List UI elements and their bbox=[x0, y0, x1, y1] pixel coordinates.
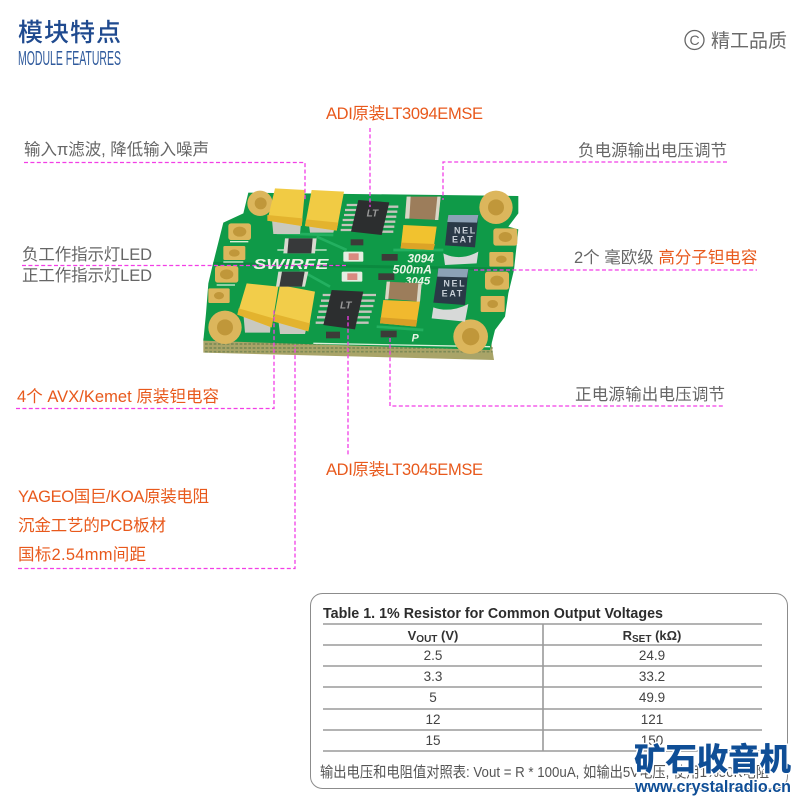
title: module features bbox=[18, 19, 121, 70]
table content bbox=[408, 628, 681, 748]
callout: status LEDs bbox=[22, 245, 346, 285]
inductors and shielded parts bbox=[276, 215, 478, 322]
callout: LT3094: ADI原装LT3094EMSE bbox=[326, 104, 483, 123]
watermark: www.crystalradio.cn bbox=[634, 777, 791, 796]
callout: positive output adjust bbox=[390, 338, 725, 406]
table content: (kΩ) bbox=[651, 628, 681, 643]
callout: LT3045: ADI原装LT3045EMSE bbox=[326, 460, 483, 479]
callout: tantalum capacitors: 4个 AVX/Kemet 原装钽电容 bbox=[17, 387, 219, 406]
table content: (V) bbox=[437, 628, 458, 643]
inductors and shielded parts: EAT bbox=[452, 235, 474, 245]
table content: 150 bbox=[641, 733, 663, 748]
table content: 121 bbox=[641, 712, 663, 727]
silkscreen text: 3045 bbox=[405, 276, 431, 288]
title: module features: MODULE FEATURES bbox=[18, 47, 121, 70]
callout: polymer capacitors: 2个 毫欧级 高分子钽电容 bbox=[574, 248, 757, 267]
board edge bbox=[203, 338, 494, 360]
watermark: 矿石收音机 bbox=[634, 741, 791, 777]
table content: R bbox=[623, 628, 632, 643]
table content: V bbox=[408, 628, 416, 643]
callout: resistors PCB pitch: 国标2.54mm间距 bbox=[18, 545, 146, 564]
title: module features: 模块特点 bbox=[18, 19, 121, 47]
silkscreen text: 3094 bbox=[407, 251, 434, 265]
silkscreen text: P bbox=[412, 332, 420, 344]
table content: 5 bbox=[429, 690, 437, 705]
table content: 24.9 bbox=[639, 648, 665, 663]
table content: OUT bbox=[416, 634, 437, 645]
silkscreen text bbox=[253, 251, 434, 344]
tantalum capacitors bbox=[237, 188, 437, 334]
LEDs and small resistors bbox=[326, 239, 398, 338]
callout: resistors PCB pitch: YAGEO国巨/KOA原装电阻 bbox=[18, 487, 209, 506]
gold mounting pads bbox=[208, 191, 517, 354]
table content: 12 bbox=[425, 712, 441, 727]
callout: status LEDs: 正工作指示灯LED bbox=[22, 266, 152, 285]
callout: positive output adjust: 正电源输出电压调节 bbox=[575, 385, 725, 404]
inductors and shielded parts: EAT bbox=[442, 289, 464, 299]
board surface bbox=[203, 193, 518, 350]
callout: pi filter bbox=[24, 140, 305, 200]
silkscreen text: 500mA bbox=[393, 262, 432, 276]
table title: Table 1. 1% Resistor for Common Output Voltages bbox=[323, 606, 663, 622]
PCB module photo bbox=[203, 188, 518, 360]
callout: status LEDs: 负工作指示灯LED bbox=[22, 245, 152, 264]
inductors and shielded parts: NEL bbox=[443, 279, 466, 289]
table content: 3.3 bbox=[424, 669, 442, 684]
regulator ICs bbox=[316, 200, 398, 329]
table content: 49.9 bbox=[639, 690, 665, 705]
silkscreen text: SWIRFE bbox=[253, 257, 330, 273]
table content: 15 bbox=[425, 733, 441, 748]
regulator ICs: LT bbox=[340, 300, 352, 311]
watermark bbox=[634, 741, 791, 796]
panel: resistor table bbox=[310, 594, 788, 788]
callout: tantalum capacitors bbox=[16, 310, 274, 408]
callout: pi filter: 输入π滤波, 降低输入噪声 bbox=[24, 140, 209, 159]
table content: 2.5 bbox=[424, 648, 442, 663]
brand mark: quality: 精工品质 bbox=[711, 30, 787, 52]
brown ceramic capacitors bbox=[385, 197, 441, 302]
table rules bbox=[323, 624, 762, 751]
table content: 33.2 bbox=[639, 669, 665, 684]
callout: resistors PCB pitch bbox=[18, 345, 295, 568]
inductors and shielded parts: NEL bbox=[454, 225, 477, 235]
regulator ICs: LT bbox=[367, 209, 379, 220]
table content: SET bbox=[632, 634, 651, 645]
callout: negative output adjust bbox=[443, 141, 727, 200]
callout: negative output adjust: 负电源输出电压调节 bbox=[578, 141, 727, 160]
brand mark: quality: C bbox=[689, 32, 700, 48]
callout: resistors PCB pitch: 沉金工艺的PCB板材 bbox=[18, 516, 166, 535]
